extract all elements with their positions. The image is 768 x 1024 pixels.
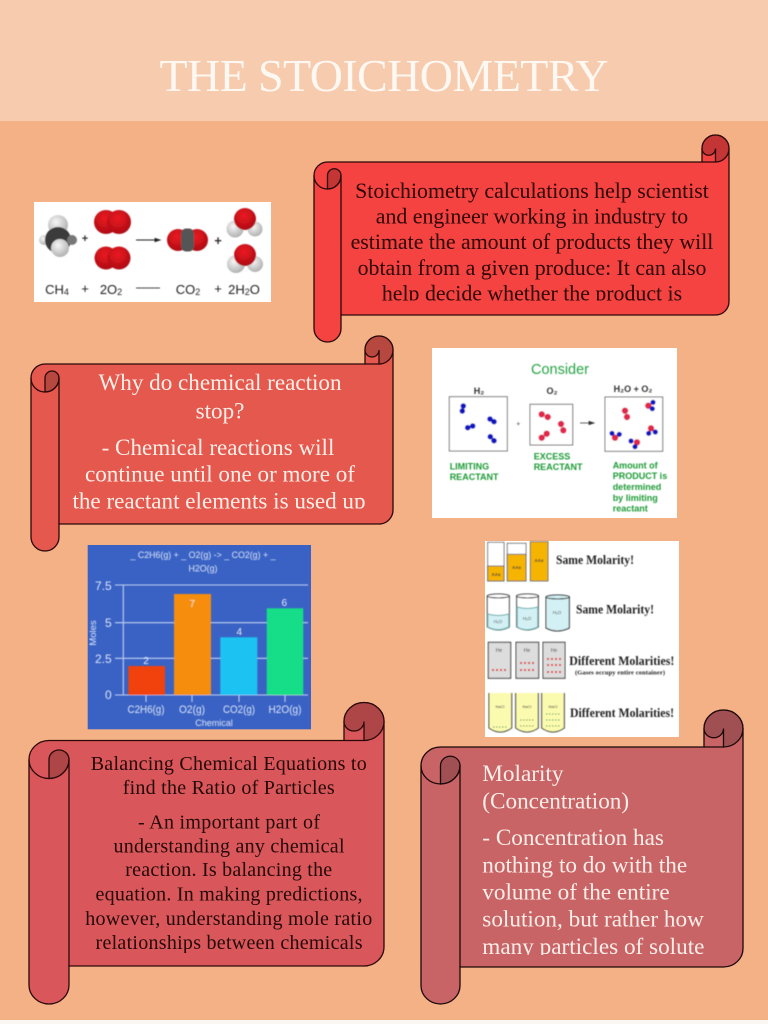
axis title: chemical: Chemical — [195, 718, 233, 728]
text: stoichiometry description: obtain from a given produce: It can also — [358, 256, 706, 280]
row: different molarity solutions: NaCl — [549, 704, 558, 709]
chemical equation labels: CO — [176, 282, 195, 297]
heading: consider: Consider — [531, 362, 589, 378]
y axis labels: 0 — [105, 688, 112, 702]
text: balancing equations: find the Ratio of Particles — [123, 777, 335, 799]
row: same molarity solids: AAs — [512, 565, 521, 570]
row: same molarity liquids — [487, 594, 569, 631]
row: different molarity gases: He — [496, 648, 502, 654]
y axis labels: 5 — [105, 616, 112, 630]
text: why reactions stop: - Chemical reactions will — [102, 434, 334, 460]
chemical equation labels: 2 — [195, 287, 200, 297]
panel: why reactions stop scroll — [31, 336, 393, 551]
molarity captions: Same Molarity! — [576, 602, 654, 616]
text: molarity: volume of the entire — [482, 879, 670, 905]
chart title: _ C2H6(g) + _ O2(g) -> _ CO2(g) + _ — [130, 550, 276, 561]
text: balancing equations — [85, 753, 372, 954]
chemical equation labels: O — [250, 282, 260, 297]
text: balancing equations: reaction. Is balancing the — [125, 859, 332, 881]
green reactant captions — [450, 451, 667, 514]
text: stoichiometry description: estimate the amount of products they will — [351, 230, 713, 254]
title: THE STOICHOMETRY — [160, 50, 608, 101]
image: limiting reactant diagram: + — [516, 421, 520, 428]
chemical equation labels: 2 — [117, 287, 122, 297]
chemical equation labels: CH — [45, 282, 64, 297]
axis title: moles: Moles — [88, 620, 99, 646]
molecules: limiting and product blue — [460, 400, 658, 449]
green reactant captions: reactant — [613, 504, 648, 514]
text: molarity: Molarity — [482, 761, 564, 787]
text: stoichiometry description — [351, 179, 713, 306]
molarity captions: Different Molarities! — [569, 653, 674, 668]
text: why reactions stop: the reactant elements is used up — [72, 488, 366, 514]
grid and axes — [115, 585, 308, 702]
text: molarity: (Concentration) — [482, 788, 629, 814]
text: balancing equations: equation. In making predictions, — [96, 884, 362, 906]
diagram boxes — [449, 397, 663, 451]
header band — [0, 0, 768, 121]
y axis labels — [95, 579, 112, 702]
green reactant captions: determined — [613, 482, 661, 492]
x axis labels: O2(g) — [179, 704, 205, 716]
molarity captions: Different Molarities! — [570, 705, 674, 720]
chemical equation labels: 2H — [228, 282, 245, 297]
bar values: 7 — [190, 599, 196, 610]
row: different molarity solutions — [489, 693, 564, 732]
panel: balancing chemical equations scroll — [29, 703, 384, 1004]
text: why reactions stop: Why do chemical reaction — [98, 369, 342, 395]
text: stoichiometry description: Stoichiometry calculations help scientist — [355, 179, 709, 203]
molarity captions: Same Molarity! — [556, 552, 634, 567]
green reactant captions: REACTANT — [534, 462, 583, 472]
chemical equation labels: + — [81, 281, 89, 296]
bar values: 6 — [282, 598, 288, 609]
row: different molarity gases: He — [524, 648, 530, 654]
text: balancing equations: relationships between chemicals — [96, 932, 363, 954]
row: same molarity solids: AAs — [491, 572, 501, 577]
row: different molarity solutions: NaCl — [496, 704, 505, 709]
icon: water molecules — [226, 208, 263, 273]
text: stoichiometry description: help decide whether the product is — [382, 282, 682, 306]
bar values: 2 — [143, 656, 149, 667]
image: limiting reactant diagram — [432, 348, 677, 518]
molarity captions — [556, 552, 674, 720]
text: why reactions stop: stop? — [196, 398, 244, 424]
green reactant captions: by limiting — [613, 493, 658, 503]
text: molarity: - Concentration has — [482, 825, 664, 851]
bar values — [143, 598, 288, 667]
icon: methane molecule — [39, 215, 77, 257]
image: methane combustion molecules: + — [82, 233, 88, 245]
x axis labels: CO2(g) — [223, 704, 255, 716]
green reactant captions: REACTANT — [450, 472, 499, 482]
diagram labels: O₂ — [546, 386, 558, 396]
x axis labels: C2H6(g) — [128, 704, 164, 716]
chemical equation labels: 2O — [100, 282, 117, 297]
bar chart: moles per chemical — [88, 545, 311, 729]
diagram labels: H₂O + O₂ — [614, 384, 652, 394]
chart title — [130, 550, 276, 575]
text: stoichiometry description: and engineer working in industry to — [376, 204, 688, 228]
image: molarity comparison — [485, 541, 679, 737]
chemical equation labels — [45, 281, 260, 297]
y axis labels: 7.5 — [95, 579, 112, 593]
bars — [128, 594, 303, 695]
row: same molarity liquids: H₂O — [523, 616, 532, 621]
text: balancing equations: Balancing Chemical Equations to — [91, 753, 367, 775]
row: same molarity solids — [488, 542, 548, 581]
row: different molarity gases — [488, 642, 565, 678]
x axis labels — [128, 704, 302, 716]
row: same molarity solids: AAs — [534, 558, 544, 563]
row: same molarity liquids: H₂O — [553, 610, 562, 615]
panel: stoichiometry calculations scroll — [314, 135, 729, 342]
image: methane combustion molecules: + — [214, 233, 222, 248]
text: balancing equations: understanding any chemical — [114, 835, 345, 857]
arrow: reaction — [580, 421, 594, 425]
row: different molarity gases: He — [551, 648, 557, 654]
icon: carbon dioxide molecule — [167, 228, 208, 252]
green reactant captions: LIMITING — [450, 461, 489, 471]
panel: molarity scroll — [421, 710, 743, 1004]
image: methane combustion molecules — [34, 202, 271, 302]
chemical equation labels: 2 — [245, 287, 250, 297]
chemical equation labels: + — [214, 281, 222, 296]
text: why reactions stop — [72, 369, 366, 514]
text: balancing equations: - An important part of — [138, 811, 320, 833]
chemical equation labels: 4 — [64, 287, 69, 297]
text: balancing equations: however, understanding mole ratio — [85, 908, 372, 930]
row: same molarity liquids: H₂O — [494, 619, 503, 624]
molarity captions: (Gases occupy entire container) — [575, 670, 665, 676]
y axis labels: 2.5 — [95, 652, 112, 666]
green reactant captions: PRODUCT is — [613, 471, 667, 481]
text: molarity: nothing to do with the — [482, 852, 687, 878]
text: molarity: solution, but rather how — [482, 907, 704, 933]
bar values: 4 — [237, 627, 243, 638]
diagram labels: H₂ — [474, 386, 484, 396]
row: different molarity solutions: NaCl — [523, 704, 532, 709]
text: why reactions stop: continue until one or more of — [85, 460, 355, 486]
molecules: excess and product red — [538, 402, 654, 445]
arrow: reaction — [136, 238, 160, 242]
text: molarity: many particles of solute — [482, 934, 704, 960]
icon: oxygen molecules — [94, 210, 131, 270]
chart title: H2O(g) — [188, 564, 218, 575]
green reactant captions: Amount of — [613, 460, 659, 470]
text: molarity — [482, 761, 704, 960]
diagram labels — [474, 384, 652, 396]
x axis labels: H2O(g) — [268, 704, 302, 716]
green reactant captions: EXCESS — [534, 451, 570, 461]
